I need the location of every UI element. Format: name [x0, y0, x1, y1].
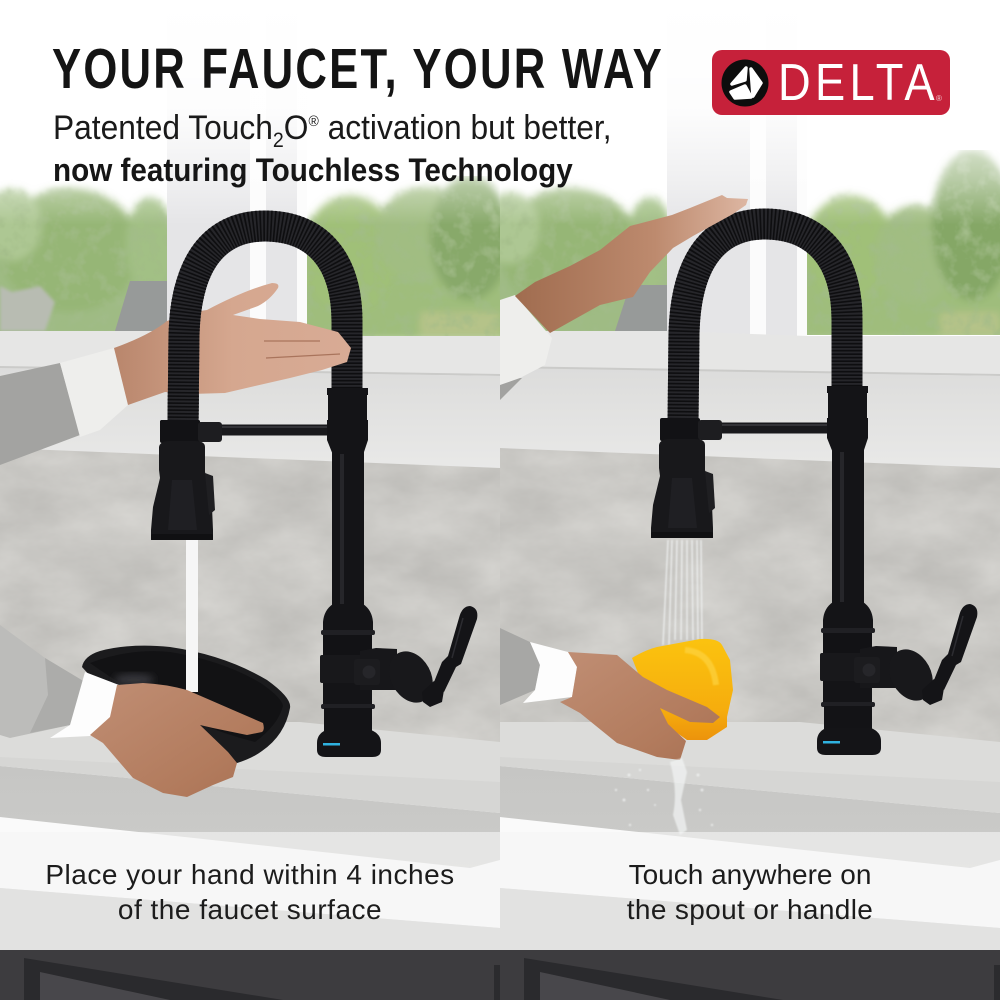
- caption: left: of the faucet surface: [118, 894, 382, 925]
- water drips: [615, 758, 713, 835]
- caption: right: the spout or handle: [627, 894, 873, 925]
- yellow pepper: [632, 639, 733, 740]
- left upper arm and hand: [0, 283, 351, 465]
- logo wordmark: DELTA: [778, 54, 939, 112]
- subtitle: [53, 109, 612, 188]
- subtitle line one: Patented Touch2O® activation but better,: [53, 109, 612, 152]
- logo: Delta: [712, 50, 950, 115]
- caption: left: Place your hand within 4 inches: [45, 859, 455, 890]
- icon: Delta emblem: [722, 60, 768, 106]
- right faucet: [651, 224, 977, 755]
- caption: right: [627, 859, 873, 925]
- water stream: [186, 540, 198, 692]
- caption: right: Touch anywhere on: [629, 859, 871, 890]
- background: left window and trees: [0, 141, 500, 1000]
- left faucet: [151, 226, 477, 757]
- left spout tube in front of hand: [160, 285, 206, 422]
- bowl: [82, 646, 290, 765]
- left lower arm and hand: [0, 625, 264, 797]
- title: YOUR FAUCET, YOUR WAY: [52, 37, 664, 101]
- right lower arm and hand: [500, 628, 733, 760]
- header fade overlay: [0, 0, 1000, 225]
- caption band: [0, 832, 1000, 950]
- right upper arm and hand: [500, 195, 748, 400]
- registered mark: ®: [936, 94, 942, 103]
- subtitle line two: now featuring Touchless Technology: [53, 152, 573, 188]
- spray water: [663, 540, 702, 645]
- background: right window and trees: [500, 141, 1000, 1000]
- caption: left: [45, 859, 455, 925]
